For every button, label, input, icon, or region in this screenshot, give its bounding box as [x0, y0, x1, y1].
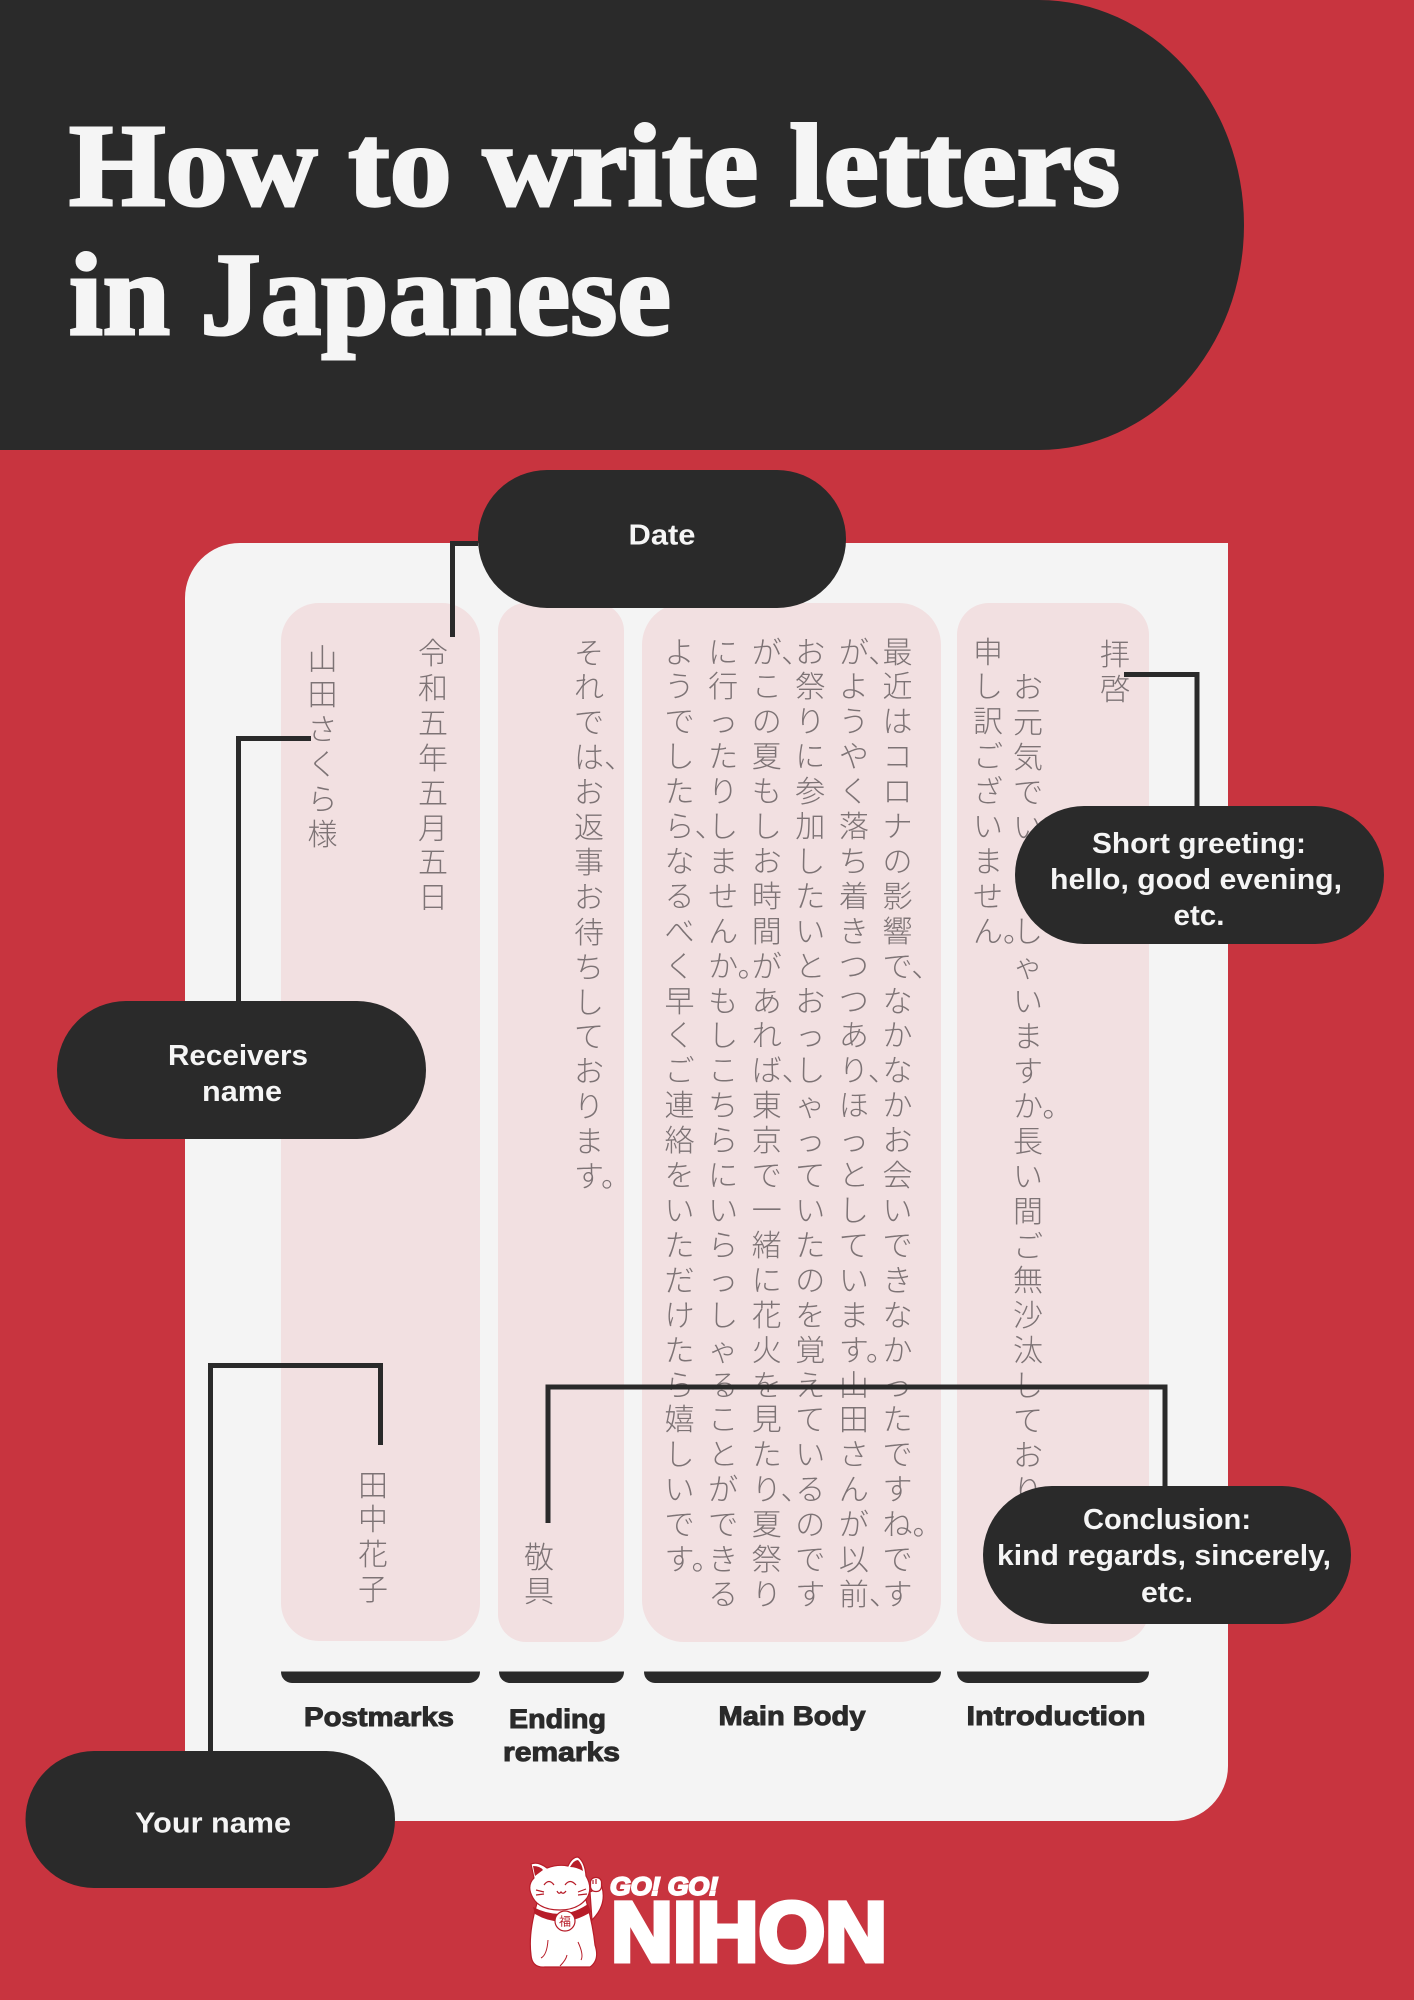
section label: ending remarks: Ending: [509, 1704, 606, 1734]
callout: your name: Your name: [135, 1808, 291, 1840]
panel: ending remarks column: [498, 603, 624, 1642]
title banner background: [0, 0, 1244, 450]
main body line 3: お祭りに参加したいとおっしゃっていたのを覚えているのです: [795, 636, 825, 1612]
callout: short greeting: [1015, 674, 1384, 944]
callout: conclusion: etc.: [1141, 1577, 1193, 1609]
callout: receivers name: name: [202, 1076, 282, 1108]
conclusion word text: 敬具: [524, 1542, 554, 1609]
callout: receivers name: Receivers: [168, 1040, 308, 1072]
panel: main body column: [642, 603, 941, 1642]
callout: date: Date: [628, 520, 696, 552]
receiver name text: 山田さくら様: [308, 644, 338, 852]
date text: 令和五年五月五日: [418, 638, 448, 915]
callout: short greeting: etc.: [1174, 900, 1224, 932]
callout: short greeting: Short greeting:: [1092, 828, 1306, 860]
logo: Go! Go! Nihon: [530, 1857, 887, 1979]
icon: beckoning cat: [530, 1857, 603, 1967]
main body line 5: に行ったりしませ ん か。 もしこちらにいらっしゃることができる: [708, 636, 768, 1612]
callout: date: [452, 470, 846, 637]
callout: conclusion: kind regards, sincerely,: [997, 1540, 1331, 1572]
main body line 2: が、 ようやく落ち着きつつあ り、 ほっとしていま す。 山田さんが以 前、: [839, 636, 899, 1612]
letter card: [185, 543, 1228, 1821]
title: How to write letters: [69, 100, 1120, 231]
callout: your name: [26, 1366, 395, 1888]
section label: introduction: [957, 1672, 1149, 1731]
section label: postmarks: [281, 1672, 480, 1732]
section label: ending remarks: remarks: [503, 1737, 620, 1767]
panel: introduction column: [957, 603, 1149, 1642]
introduction line 2: 申し訳ございませ ん。: [973, 636, 1033, 949]
logo wordmark large: NIHON: [611, 1885, 887, 1979]
panel: postmarks column: [281, 603, 480, 1641]
section label: ending remarks: [499, 1672, 624, 1767]
main body line 1: 最近はコロナの影 響 で、 なかなかお会いできなかったです ね。 です: [882, 636, 942, 1612]
callout: conclusion: Conclusion:: [1083, 1504, 1251, 1536]
logo wordmark small: GO! GO!: [610, 1873, 718, 1901]
section label: introduction: Introduction: [966, 1701, 1146, 1731]
sender name text: 田中花子: [358, 1470, 388, 1607]
title: in Japanese: [69, 229, 671, 360]
section label: main body: Main Body: [718, 1701, 866, 1731]
callout: receivers name: [57, 738, 426, 1139]
short greeting word: 拝啓: [1100, 639, 1130, 707]
callout: short greeting: hello, good evening,: [1050, 864, 1342, 896]
icon: beckoning cat: 福: [559, 1914, 571, 1928]
introduction line 1: お元気でいらっしゃいます か。 長い間ご無沙汰しております: [1013, 672, 1072, 1578]
callout: conclusion: [548, 1387, 1351, 1624]
title: [69, 100, 1120, 360]
section label: postmarks: Postmarks: [304, 1702, 454, 1732]
section label: main body: [644, 1672, 941, 1731]
main body line 4: が、 この夏もしお時間があれ ば、 東京で一緒に花火を見た り、 夏祭り: [752, 636, 812, 1612]
ending remarks text: それで は、 お返事お待ちしておりま す。: [574, 638, 634, 1194]
main body line 6: ようでした ら、 なるべく早くご連絡をいただけたら嬉しいで す。: [664, 636, 724, 1577]
